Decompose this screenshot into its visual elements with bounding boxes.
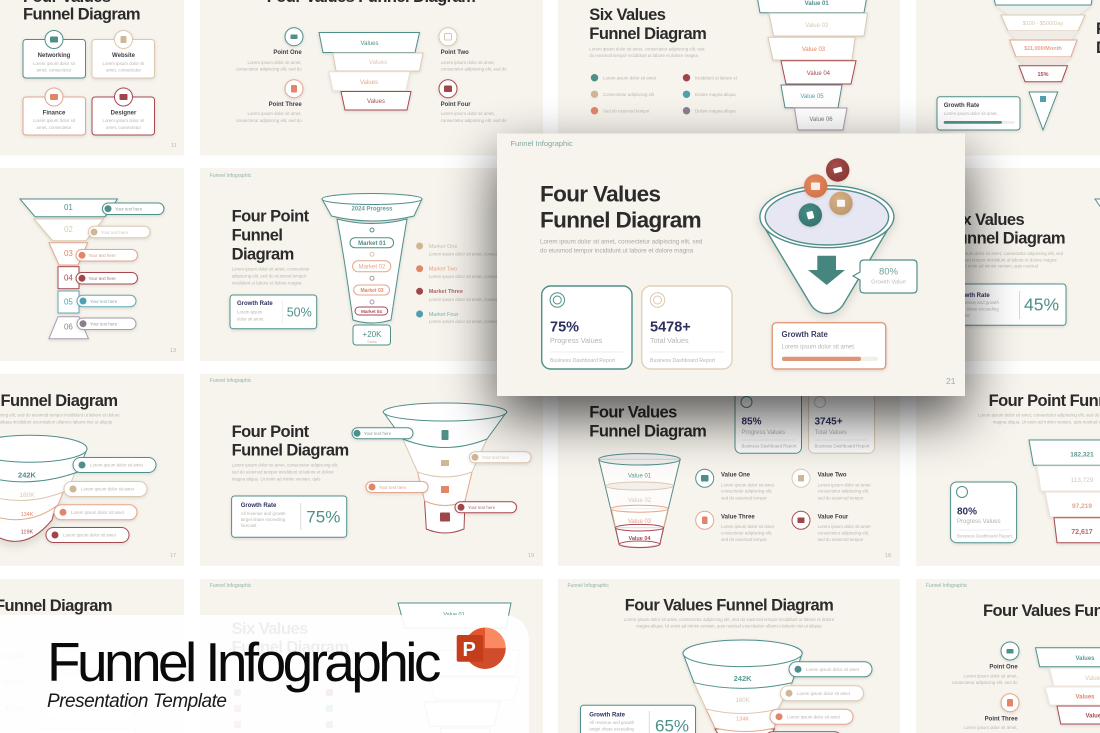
labels: Lorem ipsum dolor sit amet xyxy=(787,714,841,720)
panel: slide with four point values xyxy=(200,0,543,156)
stat card 3745+: Total Values xyxy=(814,430,847,436)
point three: Point Three xyxy=(269,102,302,108)
heading: Funnel Diagram xyxy=(589,423,706,441)
funnel layers: 182,321 xyxy=(1070,452,1094,458)
funnel layers: 180K xyxy=(19,492,35,499)
funnel layers: Values xyxy=(361,41,378,47)
point four: Point Four xyxy=(441,102,471,108)
value three: sed do eiusmod tempor xyxy=(721,537,767,542)
funnel pieces: 15% xyxy=(1037,72,1049,78)
labels: Your text here xyxy=(379,485,407,490)
stat card 3745+: Business Dashboard Report xyxy=(814,444,870,449)
page number 11: 11 xyxy=(171,143,177,149)
faded values: 113,729 xyxy=(3,681,25,687)
description: Lorem ipsum dolor sit amet, consectetur adipiscing elit, xyxy=(232,463,338,468)
point three: Lorem ipsum dolor sit amet, xyxy=(964,725,1018,730)
funnel layers xyxy=(1029,440,1100,543)
card: website: Lorem ipsum dolor sit xyxy=(103,61,145,66)
page number 13: 13 xyxy=(170,348,176,354)
faded values: 182,321 xyxy=(3,654,25,660)
hero slide shadow xyxy=(497,155,965,417)
legend: Dolore magna aliqua xyxy=(695,108,736,114)
card: designer xyxy=(92,88,154,135)
stat card: 75% progress values xyxy=(542,286,632,369)
panel: four values glass funnel xyxy=(558,370,900,566)
point four xyxy=(439,80,507,123)
funnel layers: Values xyxy=(360,80,378,86)
value four: sed do eiusmod tempor xyxy=(818,537,864,542)
card: networking: Lorem ipsum dolor sit xyxy=(33,61,76,66)
growth rate card 45%: Growth Rate xyxy=(954,293,990,299)
value two: Value Two xyxy=(818,473,847,479)
labels: Lorem ipsum dolor sit amet xyxy=(71,510,125,515)
value two: sed do eiusmod tempor xyxy=(818,495,864,500)
stat card 3745+ xyxy=(809,370,875,453)
description: aliqua incididunt exercitation ullamco laboris nisi ut aliquip xyxy=(0,419,113,424)
description: Lorem ipsum dolor sit amet, consectetur adipiscing elit, sed xyxy=(540,239,703,246)
point one: consectetur adipiscing elit, sed do xyxy=(952,680,1018,685)
funnel layers: 180K xyxy=(736,698,750,704)
funnel with market pills: 2024 Progress xyxy=(351,207,393,213)
header label: Funnel Infographic xyxy=(210,378,252,384)
funnel layers: 134K xyxy=(736,716,749,722)
point two xyxy=(439,28,507,72)
point three xyxy=(236,80,303,123)
growth rate card 65% xyxy=(580,705,696,733)
page number 19: 19 xyxy=(528,553,534,559)
stacked funnel: Value 02 xyxy=(805,23,829,29)
card: networking xyxy=(23,30,86,78)
point three: consectetur adipiscing elit, sed do xyxy=(236,118,302,123)
card: networking: amet, consectetur xyxy=(37,68,72,72)
labels: Your text here xyxy=(90,322,118,326)
growth rate card 50% xyxy=(230,295,317,329)
point one: Lorem ipsum dolor sit amet, xyxy=(248,60,302,65)
growth rate card 75%: forecast xyxy=(241,523,257,528)
heading: six values: Six Values xyxy=(589,6,666,24)
stacked funnel xyxy=(757,0,868,130)
panel: four point funnel with markets xyxy=(200,168,543,361)
funnel with market pills: Market 04 xyxy=(361,309,382,314)
icon balls xyxy=(799,158,853,227)
stat card 85%: 85% xyxy=(742,417,762,428)
description: do eiusmod tempor incididunt ut labore et dolore magna xyxy=(589,53,698,58)
funnel steps: 04 xyxy=(64,274,73,282)
point four: consectetur adipiscing elit, sed do xyxy=(441,118,507,123)
stacked funnel: Value 03 xyxy=(802,47,826,53)
glass funnel: Value 01 xyxy=(628,474,652,480)
growth rate card xyxy=(937,97,1020,130)
value two: Lorem ipsum dolor sit amet xyxy=(818,482,871,487)
glass funnel xyxy=(599,454,680,548)
description: do eiusmod tempor incididunt ut labore et dolore magna xyxy=(948,258,1057,263)
legend: Sed do eiusmod tempor xyxy=(603,108,650,114)
panel: six values funnel xyxy=(558,0,900,156)
growth rate card: Lorem ipsum dolor sit amet. xyxy=(944,111,998,116)
value three: Value Three xyxy=(721,515,755,521)
point one: consectetur adipiscing elit, sed do xyxy=(236,66,302,72)
labels: Lorem ipsum dolor sit amet xyxy=(81,486,135,492)
value three: Lorem ipsum dolor sit amet xyxy=(721,524,775,529)
value three xyxy=(696,511,775,542)
legend: Incididunt ut labore et xyxy=(695,76,738,80)
stat card: 5478+ total values: 5478+ xyxy=(650,320,691,336)
stat card: 75% progress values: Progress Values xyxy=(550,336,603,345)
point three: Point Three xyxy=(985,716,1018,722)
header label: Funnel Infographic xyxy=(926,583,968,589)
description: Lorem ipsum dolor sit amet, consectetur adipiscing elit, sed do eiusmod tempor incididunt ut labore et dolore xyxy=(624,617,835,622)
growth rate card 65%: All revenue and growth xyxy=(589,720,635,725)
faded values xyxy=(3,650,147,733)
stat card: 5478+ total values: Total Values xyxy=(650,336,689,345)
funnel layers: 242K xyxy=(18,470,37,480)
description: cing elit, sed do eiusmod tempor incididunt ut labore et dolore xyxy=(0,413,120,418)
heading: Funnel Diagram xyxy=(948,229,1065,247)
glass funnel: Value 02 xyxy=(628,498,652,504)
point one xyxy=(236,28,303,72)
description: incididunt ut labore et dolore magna xyxy=(232,280,302,285)
market legend: Market Four xyxy=(429,312,459,318)
labels: Lorem ipsum dolor sit amet xyxy=(63,532,117,538)
title banner xyxy=(0,615,529,733)
growth rate card 50%: dolor sit amet. xyxy=(237,316,265,321)
description: Lorem ipsum dolor sit amet, consectetur xyxy=(232,267,310,272)
funnel steps: 06 xyxy=(64,322,73,332)
funnel with market pills xyxy=(322,194,422,345)
growth rate progress card xyxy=(772,323,886,369)
point one: Point One xyxy=(273,50,302,56)
heading: Four Values xyxy=(540,182,661,207)
market legend xyxy=(416,242,507,324)
down arrow xyxy=(808,256,845,285)
legend: Dolore magna aliqua xyxy=(695,92,736,97)
point one: Point One xyxy=(989,665,1018,671)
point four: Lorem ipsum dolor sit amet, xyxy=(441,111,495,116)
growth rate card 65%: target share exceeding xyxy=(589,726,635,732)
heading: Funnel Diagram xyxy=(540,208,701,232)
card: website xyxy=(92,30,154,78)
value label: Value 01 xyxy=(443,612,465,618)
heading: Funnel Diagram xyxy=(232,441,349,459)
card: finance: Finance xyxy=(43,110,66,116)
stat card 85%: Business Dashboard Report xyxy=(742,444,797,449)
legend xyxy=(591,74,738,114)
funnel steps: 01 xyxy=(64,203,73,212)
growth rate card 75%: Growth Rate xyxy=(241,503,277,509)
market legend: Market One xyxy=(429,244,457,250)
market legend: Lorem ipsum dolor sit amet, consectetur xyxy=(429,251,507,256)
heading: Four Point xyxy=(232,208,310,226)
legend: Consectetur adipiscing elit xyxy=(603,92,655,97)
growth rate card 45% xyxy=(947,284,1066,325)
funnel layers: Values xyxy=(367,99,385,105)
value one xyxy=(696,469,775,500)
card: designer: Lorem ipsum dolor sit xyxy=(103,118,145,123)
panel: six values bottom xyxy=(200,579,543,733)
funnel with market pills: Market 03 xyxy=(360,288,384,294)
heading: Diagram xyxy=(232,245,294,263)
description: Lorem ipsum dolor sit amet, consectetur adipiscing elit, sed xyxy=(948,251,1064,256)
panel: four point funnel 75 percent xyxy=(200,374,543,566)
growth rate progress card: Growth Rate xyxy=(782,330,829,339)
description: sed do eiusmod tempor incididunt ut labore et dolore xyxy=(232,470,334,475)
funnel layers xyxy=(383,403,507,533)
growth rate progress card: Lorem ipsum dolor sit amet. xyxy=(782,345,856,351)
card: website: amet, consectetur xyxy=(106,68,141,72)
labels: Your text here xyxy=(468,505,496,510)
title: Funnel Infographic xyxy=(47,631,441,693)
description: do eiusmod tempor incididunt ut labore et dolore magna xyxy=(540,248,694,255)
labels xyxy=(76,203,164,330)
funnel layers: Values xyxy=(369,60,387,66)
point one xyxy=(952,642,1019,685)
heading: Funnel xyxy=(232,227,282,245)
funnel with market pills: +20K xyxy=(363,330,382,339)
heading: slide 11: Funnel Diagram xyxy=(23,6,140,24)
funnel layers: Values xyxy=(1075,694,1095,700)
growth rate card 75%: target share exceeding xyxy=(241,517,286,522)
panel: six step funnel xyxy=(0,168,184,361)
funnel stack xyxy=(398,603,520,733)
funnel xyxy=(760,186,894,314)
growth rate card 65%: Growth Rate xyxy=(589,713,626,719)
heading: Four Values xyxy=(589,404,677,422)
stat card: 75% progress values: 75% xyxy=(550,320,579,336)
value one: consectetur adipiscing elit, xyxy=(721,489,772,494)
stat card: 5478+ total values: Business Dashboard Report xyxy=(650,358,715,364)
callout: 80% growth value xyxy=(853,260,917,293)
growth rate card 75%: All revenue and growth xyxy=(241,511,286,516)
callout: 80% growth value: Growth Value xyxy=(871,280,906,286)
funnel layers xyxy=(319,32,423,110)
stacked funnel: Value 05 xyxy=(800,94,824,100)
market legend: Lorem ipsum dolor sit amet, consectetur xyxy=(429,274,507,279)
growth rate card: Growth Rate xyxy=(944,103,980,109)
card: finance xyxy=(23,88,86,135)
legend: Lorem ipsum dolor sit amet xyxy=(603,76,657,80)
stat card 3745+: 3745+ xyxy=(814,417,843,428)
description: Lorem ipsum dolor sit amet, consectetur adipiscing elit, sed xyxy=(589,46,705,52)
growth rate card 45%: target share exceeding xyxy=(954,306,999,312)
description: aliqua. Ut enim ad minim veniam, quis nostrud xyxy=(948,264,1039,269)
panel: six values with 45 percent xyxy=(916,168,1100,361)
description: adipiscing elit, sed do eiusmod tempor xyxy=(232,274,307,279)
card: website: Website xyxy=(112,53,136,59)
card: finance: amet, consectetur xyxy=(37,125,72,130)
value four xyxy=(792,511,871,542)
labels: Your text here xyxy=(90,299,118,304)
labels xyxy=(352,428,531,513)
labels: Your text here xyxy=(88,276,116,281)
funnel fragment xyxy=(1095,199,1100,212)
point two: Lorem ipsum dolor sit amet, xyxy=(441,60,495,65)
funnel layers xyxy=(0,435,87,541)
page number 21: 21 xyxy=(946,376,956,386)
value three: consectetur adipiscing elit, xyxy=(721,531,772,536)
market legend: Market Two xyxy=(429,266,457,272)
market legend: Market Three xyxy=(429,289,463,295)
heading: Four Point xyxy=(232,423,310,441)
stacked funnel: Value 06 xyxy=(809,117,833,123)
header label: Funnel Infographic xyxy=(510,139,573,148)
funnel with market pills: Market 02 xyxy=(359,264,386,270)
card: finance: Lorem ipsum dolor sit xyxy=(33,118,76,123)
description: magna aliqua. Ut enim ad minim veniam, quis xyxy=(232,477,321,482)
glass funnel: Value 03 xyxy=(628,519,652,525)
funnel layers: 242K xyxy=(734,674,752,683)
heading: six values: Funnel Diagram xyxy=(589,25,706,43)
panel: four values funnel 65 percent xyxy=(558,579,900,733)
labels: Your text here xyxy=(482,455,510,460)
point three xyxy=(964,694,1019,730)
heading: Six Values xyxy=(948,211,1025,229)
growth rate card 45%: forecast xyxy=(954,313,970,318)
icon: PowerPoint logo: P xyxy=(462,639,476,661)
funnel layers: 119K xyxy=(21,530,34,536)
funnel layers xyxy=(1036,648,1100,724)
market legend: Lorem ipsum dolor sit amet, consectetur xyxy=(429,319,507,324)
icon: PowerPoint logo xyxy=(457,628,506,669)
card: networking: Networking xyxy=(38,53,71,59)
heading: Funnel Diagram xyxy=(0,392,118,410)
stat card: 5478+ total values xyxy=(642,286,732,369)
funnel layers: 97,219 xyxy=(1072,503,1092,510)
panel: funnel diagram bottom left xyxy=(0,579,184,733)
point two: consectetur adipiscing elit, sed do xyxy=(441,66,507,72)
panel: four values funnel bottom right xyxy=(916,579,1100,733)
point two: Point Two xyxy=(441,50,469,56)
stat card 80%: Progress Values xyxy=(957,519,1001,525)
labels: Lorem ipsum dolor sit amet xyxy=(797,691,851,696)
stat card 85%: Progress Values xyxy=(742,430,785,436)
funnel layers: 134K xyxy=(21,512,34,518)
header label: Funnel Infographic xyxy=(210,583,252,589)
value four: Lorem ipsum dolor sit amet xyxy=(818,524,871,529)
header label: Funnel Infographic xyxy=(568,583,609,589)
heading: Four Values Funnel Diagram xyxy=(625,596,833,614)
subtitle: Presentation Template xyxy=(47,691,227,712)
value one: Lorem ipsum dolor sit amet xyxy=(721,482,775,487)
labels: Your text here xyxy=(115,206,143,212)
value one: sed do eiusmod tempor xyxy=(721,495,767,500)
stat card: 75% progress values: Business Dashboard Report xyxy=(550,358,615,364)
funnel steps: 03 xyxy=(64,249,73,258)
glass funnel: Value 04 xyxy=(628,536,651,542)
labels xyxy=(765,662,872,733)
callout: 80% growth value: 80% xyxy=(879,266,899,278)
labels: Lorem ipsum dolor sit amet xyxy=(90,462,144,468)
market legend: Lorem ipsum dolor sit amet, consectetur xyxy=(429,297,507,302)
funnel pieces xyxy=(993,0,1093,130)
growth rate card 45%: All revenue and growth xyxy=(954,300,999,305)
funnel steps: 05 xyxy=(64,298,73,306)
labels: Your text here xyxy=(101,230,129,235)
value two xyxy=(792,469,871,500)
growth rate card 50%: 50% xyxy=(287,305,312,319)
stacked funnel: Value 01 xyxy=(805,1,829,7)
stat card 80%: Business Dashboard Report xyxy=(957,533,1013,538)
value two: consectetur adipiscing elit, xyxy=(818,489,869,494)
card: designer: amet, consectetur xyxy=(106,125,141,130)
funnel pieces: $11,000/Month xyxy=(1024,46,1062,52)
faded values: 97,219 xyxy=(5,707,24,713)
growth rate card 50%: Lorem ipsum xyxy=(237,310,263,315)
funnel pieces: $100 - $500/Day xyxy=(1023,21,1064,27)
growth rate card 45%: 45% xyxy=(1024,295,1059,315)
panel: four point funnel values xyxy=(916,374,1100,566)
funnel steps: 02 xyxy=(64,225,73,234)
page number 18: 18 xyxy=(885,553,891,559)
value four: consectetur adipiscing elit, xyxy=(818,531,869,536)
stacked funnel: Value 04 xyxy=(807,71,831,77)
funnel with market pills: Market 01 xyxy=(358,241,387,247)
panel: revenue funnel xyxy=(916,0,1100,156)
stat card 85% xyxy=(735,370,802,453)
stat card 80%: 80% xyxy=(957,507,977,518)
point one: Lorem ipsum dolor sit amet, xyxy=(964,674,1018,679)
stat card 80% xyxy=(951,482,1017,543)
funnel steps xyxy=(20,199,118,339)
labels: Your text here xyxy=(364,431,392,436)
value four: Value Four xyxy=(818,515,849,521)
faded legend xyxy=(234,689,333,728)
panel: funnel diagram slide 17 xyxy=(0,374,184,566)
labels xyxy=(46,458,156,542)
labels: Lorem ipsum dolor sit amet xyxy=(806,667,860,672)
panel: slide 11 four cards xyxy=(0,0,184,156)
funnel layers: Values xyxy=(1075,656,1095,662)
point three: Lorem ipsum dolor sit amet, xyxy=(248,111,302,116)
funnel layers xyxy=(683,640,802,733)
page number 17: 17 xyxy=(170,553,176,559)
heading: Six Values xyxy=(232,620,308,638)
panel: hero slide four values funnel diagram xyxy=(497,134,965,396)
header label: Funnel Infographic xyxy=(210,173,252,179)
funnel layers: 72,617 xyxy=(1071,529,1093,536)
labels: Your text here xyxy=(88,253,116,258)
value one: Value One xyxy=(721,473,751,479)
growth rate card 75% xyxy=(232,496,347,537)
growth rate card 75%: 75% xyxy=(306,508,340,527)
description: magna aliqua. Ut enim ad minim veniam, quis nostrud exercitation ullamco laboris nisi ut aliquip xyxy=(636,624,822,629)
heading: Funnel Diagram xyxy=(232,639,349,657)
funnel layers: 113,729 xyxy=(1070,477,1094,484)
growth rate card 50%: Growth Rate xyxy=(237,301,273,307)
funnel with market pills: Sales xyxy=(367,340,377,344)
card: designer: Designer xyxy=(111,110,137,116)
